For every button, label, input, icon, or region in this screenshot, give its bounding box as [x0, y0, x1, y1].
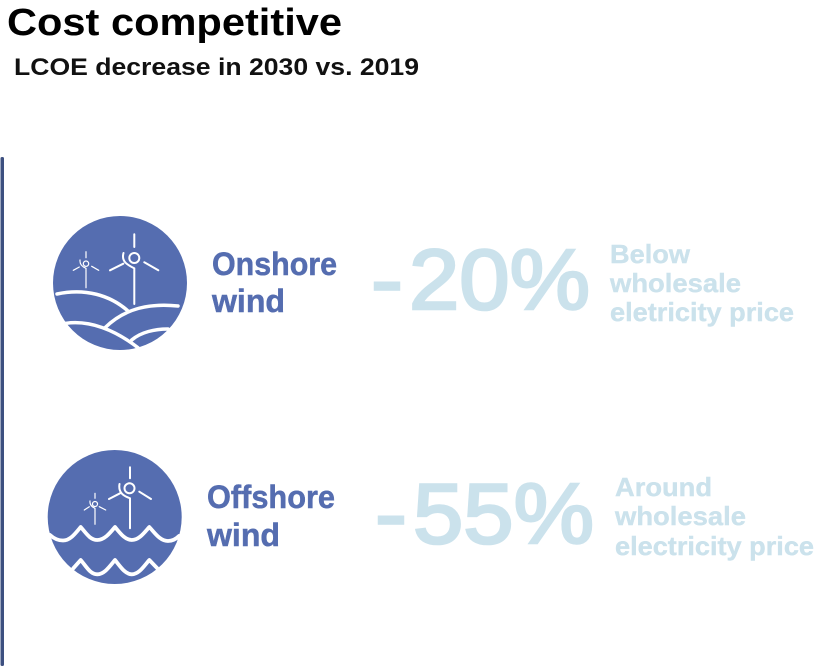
note: around wholesale price: wholesale [614, 501, 746, 531]
note: below wholesale price [609, 239, 794, 327]
vertical accent line [0, 157, 4, 666]
icon: onshore wind turbines on hills [53, 216, 187, 350]
value: minus 20 percent: - [371, 233, 403, 328]
label: offshore wind: Offshore [207, 479, 335, 515]
note: below wholesale price: Below [610, 239, 691, 269]
note: below wholesale price: wholesale [609, 268, 741, 298]
value: minus 55 percent: 55% [413, 467, 594, 562]
label: onshore wind: Onshore [212, 246, 337, 282]
label: offshore wind: wind [206, 517, 280, 553]
value: minus 55 percent: - [375, 467, 407, 562]
value: minus 20 percent: 20% [409, 233, 590, 328]
icon: offshore wind turbines on waves [48, 450, 182, 584]
note: around wholesale price [614, 472, 814, 561]
panel: onshore wind [53, 216, 794, 350]
label: onshore wind: wind [211, 283, 285, 319]
panel: offshore wind [48, 450, 814, 584]
note: below wholesale price: eletricity price [610, 297, 794, 327]
note: around wholesale price: Around [615, 472, 712, 502]
note: around wholesale price: electricity price [615, 531, 814, 561]
label: onshore wind [211, 246, 337, 319]
title: Cost competitive [7, 2, 342, 44]
subtitle: LCOE decrease in 2030 vs. 2019 [14, 54, 419, 81]
label: offshore wind [206, 479, 335, 553]
